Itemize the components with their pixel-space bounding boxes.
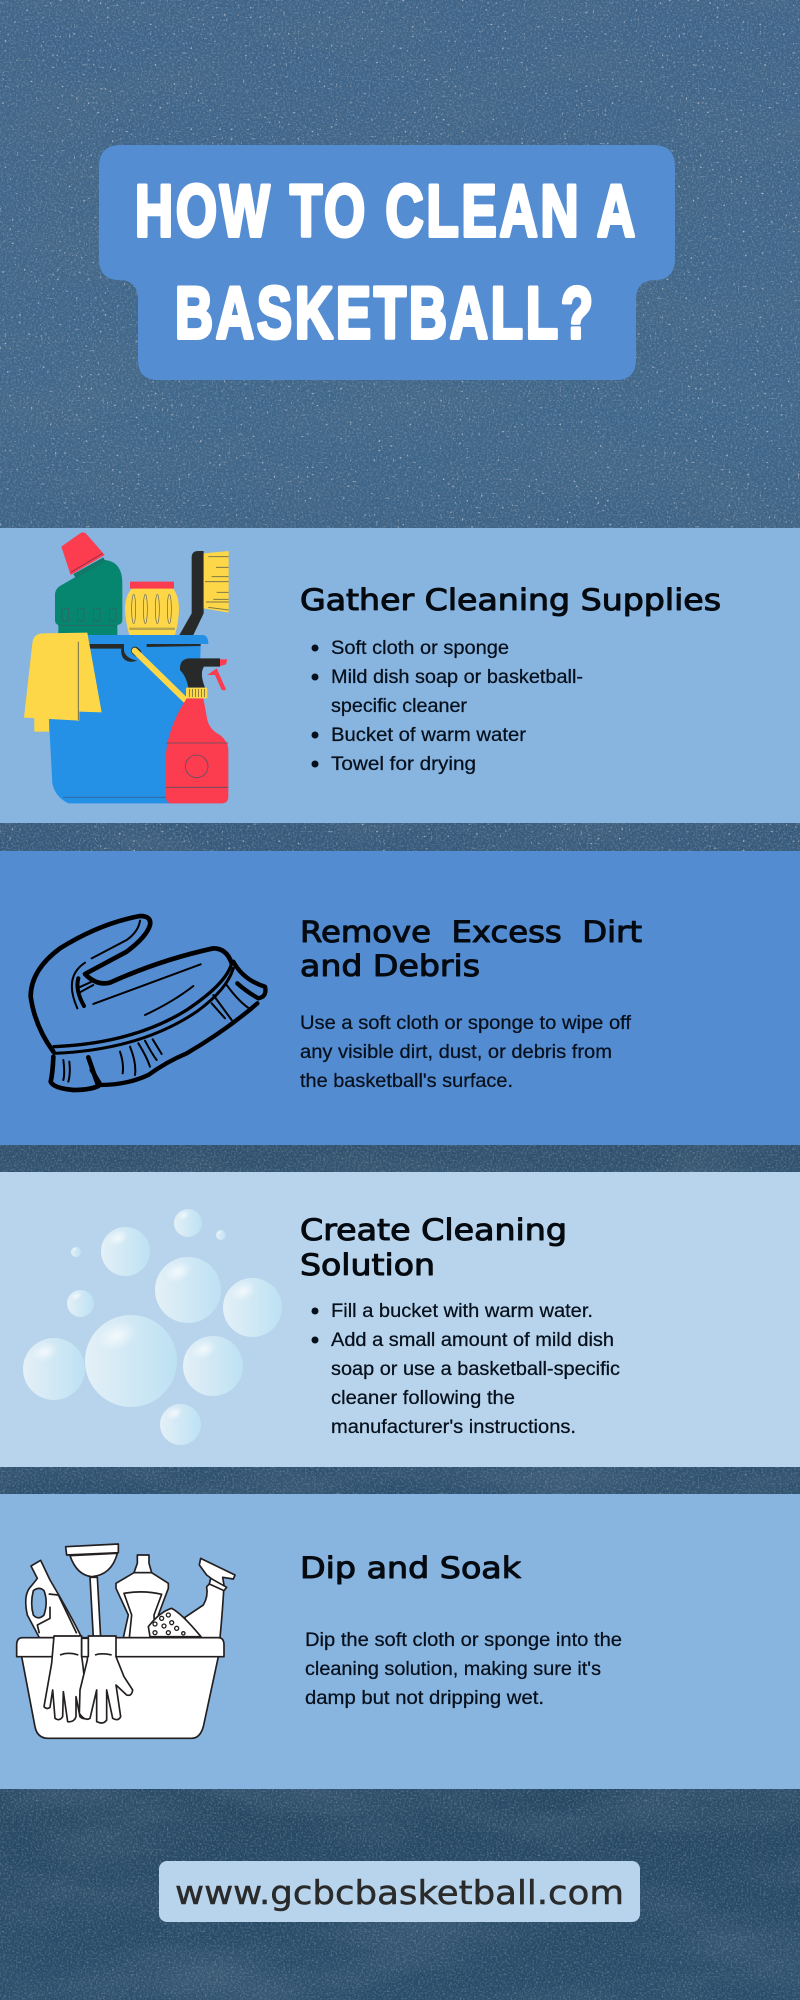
text: remove dirt description: Use a soft cloth or sponge to wipe off	[300, 1013, 632, 1034]
icon: scrub brush	[31, 916, 265, 1090]
list: solution steps	[312, 1301, 620, 1438]
title text	[135, 171, 638, 354]
icon: tub of cleaning supplies	[17, 1544, 235, 1738]
title panel	[99, 145, 675, 380]
list: solution steps: Fill a bucket with warm water.	[331, 1301, 593, 1322]
list: supplies: Bucket of warm water	[331, 725, 527, 746]
list: supplies	[312, 638, 583, 775]
heading: remove excess dirt and debris: and Debris	[300, 949, 480, 983]
heading: create cleaning solution	[300, 1213, 567, 1282]
text: dip and soak description: cleaning solution, making sure it's	[305, 1659, 601, 1680]
title text: BASKETBALL?	[175, 273, 596, 354]
heading: create cleaning solution: Solution	[300, 1248, 435, 1282]
text: remove dirt description: the basketball's surface.	[300, 1071, 513, 1092]
text: dip and soak description: damp but not dripping wet.	[305, 1688, 544, 1709]
list: supplies: specific cleaner	[331, 696, 468, 717]
heading: gather cleaning supplies: Gather Cleaning Supplies	[300, 583, 721, 617]
text: remove dirt description: any visible dirt, dust, or debris from	[300, 1042, 612, 1063]
panel: remove excess dirt and debris	[0, 851, 800, 1145]
website callout: www.gcbcbasketball.com	[175, 1873, 624, 1912]
heading: dip and soak: Dip and Soak	[300, 1551, 521, 1585]
list: solution steps: cleaner following the	[331, 1388, 515, 1409]
heading: create cleaning solution: Create Cleaning	[300, 1213, 567, 1247]
list: solution steps: manufacturer's instructions.	[331, 1417, 576, 1438]
panel: create cleaning solution	[0, 1172, 800, 1467]
list: solution steps: soap or use a basketball-specific	[331, 1359, 620, 1380]
list: supplies: Soft cloth or sponge	[331, 638, 509, 659]
icon: soap bubbles	[23, 1209, 282, 1445]
list: supplies: Mild dish soap or basketball-	[331, 667, 583, 688]
website callout	[159, 1861, 640, 1922]
icon: cleaning bucket with supplies	[24, 532, 229, 803]
list: solution steps: Add a small amount of mild dish	[331, 1330, 614, 1351]
text: remove dirt description	[300, 1013, 632, 1092]
panel: dip and soak	[0, 1494, 800, 1789]
list: supplies: Towel for drying	[331, 754, 476, 775]
panel: gather cleaning supplies	[0, 528, 800, 823]
text: dip and soak description	[305, 1630, 622, 1709]
text: dip and soak description: Dip the soft cloth or sponge into the	[305, 1630, 622, 1651]
heading: remove excess dirt and debris	[300, 915, 642, 983]
heading: remove excess dirt and debris: Remove Excess Dirt	[300, 915, 642, 949]
